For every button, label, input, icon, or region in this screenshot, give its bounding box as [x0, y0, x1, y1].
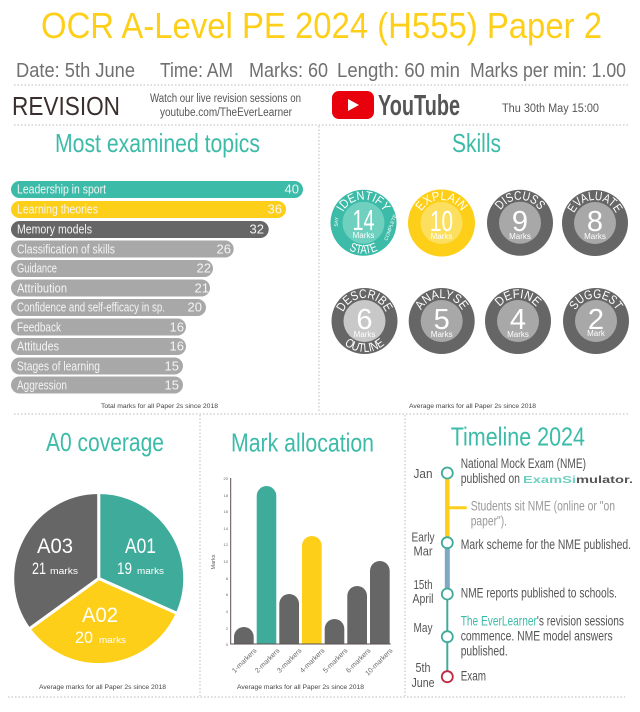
bar chart: topics: Confidence and self-efficacy in sp. — [17, 300, 165, 314]
caption: topics: Total marks for all Paper 2s since 2018 — [101, 404, 219, 410]
skill badge: identify 14 marks: STATE — [350, 242, 378, 254]
bar chart: mark allocation: 10 — [224, 559, 229, 564]
icon: youtube logo — [332, 90, 460, 122]
skill badge: explain 10 marks: EXPLAIN — [415, 191, 468, 211]
skill badge: explain 10 marks: Marks — [431, 232, 452, 241]
timeline events: ExamSi mulator. — [523, 475, 633, 486]
pie chart: AO coverage: 20 — [75, 628, 93, 647]
pie chart: AO coverage: 21 — [32, 559, 46, 578]
bar chart: mark allocation — [211, 476, 395, 677]
revision sessions text: Watch our live revision sessions on — [150, 93, 301, 105]
panel: timeline — [412, 422, 633, 690]
skill badge: explain 10 marks — [408, 190, 475, 256]
bar chart: topics: 22 — [197, 260, 211, 276]
timeline events: National Mock Exam (NME) — [461, 456, 586, 471]
heading: skills: Skills — [452, 128, 501, 158]
skill badge: define 4 marks: DEFINE — [494, 289, 542, 306]
skill badge: identify 14 marks — [330, 190, 399, 256]
bar chart: mark allocation: 3-markers — [276, 647, 304, 675]
bar chart: mark allocation: 1-markers — [231, 647, 259, 675]
revision sessions text: youtube.com/TheEverLearner — [160, 107, 292, 119]
skill badge: evaluate 8 marks: Marks — [584, 232, 606, 241]
pie chart: AO coverage: marks — [50, 566, 79, 576]
exam details row: Time: AM — [160, 60, 233, 82]
bar chart: mark allocation: 6 — [226, 592, 229, 597]
skill badge: identify 14 marks: SAY — [334, 216, 340, 227]
heading: timeline 2024: Timeline 2024 — [451, 422, 585, 452]
bar chart: topics: Memory models — [17, 222, 92, 236]
timeline dates: Mar — [414, 544, 433, 559]
bar chart: mark allocation: 18 — [224, 493, 229, 498]
bar chart: mark allocation: 0 — [226, 642, 229, 647]
exam details row: Marks: 60 — [249, 60, 328, 82]
bar chart: topics: 15 — [165, 378, 179, 392]
bar chart: mark allocation: Marks — [211, 554, 217, 569]
skill badge: suggest 2 mark — [563, 288, 629, 354]
exam details row — [16, 60, 626, 82]
skill badge: define 4 marks — [485, 288, 551, 354]
skill badge: define 4 marks: Marks — [507, 330, 529, 339]
bar chart: mark allocation: 8 — [226, 576, 229, 581]
skill badge: describe outline 6 marks: Marks — [354, 330, 375, 339]
timeline events: published. — [461, 644, 508, 659]
skill badge: identify 14 marks: Marks — [353, 231, 374, 240]
timeline dates — [412, 466, 435, 690]
bar chart: topics: 16 — [170, 338, 184, 354]
bar chart: topics: 36 — [268, 202, 282, 216]
bar chart: mark allocation: 2-markers — [254, 647, 282, 675]
skill badge: discuss 9 marks — [487, 190, 553, 256]
bar chart: topics: 40 — [285, 182, 299, 196]
skill badge: suggest 2 mark: SUGGEST — [570, 289, 624, 310]
timeline dates: April — [412, 591, 434, 606]
bar chart: topics: Learning theories — [17, 202, 98, 216]
exam details row: Date: 5th June — [16, 60, 135, 82]
caption: mark allocation: Average marks for all Paper 2s since 2018 — [237, 685, 365, 691]
panel: AO coverage — [13, 427, 185, 691]
skill badge: describe outline 6 marks: DESCRIBE — [336, 289, 393, 312]
skill badge: describe outline 6 marks — [332, 288, 398, 354]
timeline dates: Jan — [414, 466, 432, 481]
bar chart: mark allocation: 4 — [226, 609, 229, 614]
skill badge: discuss 9 marks: Marks — [509, 232, 531, 241]
session date: Thu 30th May 15:00 — [502, 103, 599, 115]
skill badge: evaluate 8 marks: 8 — [587, 206, 603, 238]
pie chart: AO coverage: A02 — [82, 604, 118, 627]
pie chart: AO coverage: marks — [137, 566, 165, 576]
heading: mark allocation: Mark allocation — [231, 428, 374, 458]
skill badge: identify 14 marks: IDENTIFY — [336, 190, 391, 212]
bar chart: mark allocation: 14 — [224, 526, 229, 531]
bar chart: topics: Attribution — [17, 280, 67, 296]
pie chart: AO coverage: A01 — [125, 535, 156, 558]
bar chart: topics: 20 — [188, 300, 202, 314]
bar chart: topics: 26 — [217, 242, 231, 256]
timeline events — [461, 456, 633, 684]
timeline dates: 15th — [414, 577, 432, 592]
revision banner — [12, 90, 599, 122]
heading: AO coverage: A0 coverage — [46, 427, 164, 457]
skill badge: identify 14 marks: COMPLETE — [384, 213, 399, 242]
timeline events: Exam — [461, 669, 486, 684]
timeline dates: June — [412, 675, 434, 690]
skill badge: evaluate 8 marks: EVALUATE — [567, 191, 623, 213]
skill badge: suggest 2 mark: 2 — [588, 304, 604, 336]
pie chart: AO coverage: marks — [99, 635, 127, 645]
skill badge: discuss 9 marks: 9 — [512, 206, 528, 238]
bar chart: mark allocation: 6-markers — [345, 647, 373, 675]
bar chart: topics: Feedback — [17, 320, 61, 334]
bar chart: topics: 15 — [165, 358, 179, 374]
panel: skills — [330, 128, 629, 410]
bar chart: topics: 32 — [250, 222, 264, 236]
skill badge: analyse 5 marks: ANALYSE — [416, 289, 469, 310]
bar chart: topics: Aggression — [17, 378, 67, 392]
skill badge: evaluate 8 marks — [562, 190, 628, 256]
skill badge: define 4 marks: 4 — [510, 304, 526, 336]
caption: AO coverage: Average marks for all Paper 2s since 2018 — [39, 685, 167, 691]
panel: most examined topics — [11, 128, 303, 410]
bar chart: mark allocation: 20 — [224, 476, 229, 481]
bar chart: mark allocation: 2 — [226, 626, 229, 631]
bar chart: topics: Leadership in sport — [17, 182, 106, 196]
title: OCR A-Level PE 2024 (H555) Paper 2 — [41, 5, 602, 46]
pie chart: AO coverage: A03 — [37, 535, 73, 558]
panel: mark allocation — [211, 428, 395, 691]
skill badge: analyse 5 marks: 5 — [434, 304, 450, 336]
timeline dates: Early — [412, 530, 435, 545]
timeline events: paper"). — [471, 514, 507, 529]
bar chart: topics: Attitudes — [17, 338, 59, 354]
bar chart: mark allocation: 4-markers — [299, 647, 327, 675]
skill badge: analyse 5 marks: Marks — [431, 330, 453, 339]
pie chart: AO coverage — [13, 492, 185, 665]
timeline dates: 5th — [416, 660, 430, 675]
skill badge: analyse 5 marks — [408, 288, 475, 354]
bar chart: mark allocation: 10-markers — [364, 647, 395, 677]
skill badge: identify 14 marks: 14 — [352, 205, 374, 237]
timeline dates: May — [414, 620, 433, 635]
bar chart: topics — [11, 181, 303, 394]
bar chart: mark allocation: 12 — [224, 542, 229, 547]
icon: youtube logo: YouTube — [378, 90, 460, 122]
timeline events: published on — [461, 471, 520, 486]
timeline track — [442, 468, 467, 682]
caption: skills: Average marks for all Paper 2s since 2018 — [409, 404, 537, 410]
bar chart: mark allocation: 16 — [224, 509, 229, 514]
bar chart: mark allocation: 5-markers — [322, 647, 350, 675]
skill badge: explain 10 marks: 10 — [430, 206, 453, 238]
revision heading: REVISION — [12, 91, 120, 121]
bar chart: topics: Classification of skills — [17, 242, 115, 256]
bar chart: topics: 21 — [195, 280, 209, 296]
skill badge: describe outline 6 marks: 6 — [356, 304, 373, 336]
skill badge: discuss 9 marks: DISCUSS — [494, 191, 545, 210]
heading: most examined topics: Most examined topics — [55, 128, 260, 158]
skill badge: describe outline 6 marks: OUTLINE — [346, 338, 384, 352]
revision sessions text — [150, 93, 301, 119]
exam details row: Length: 60 min — [337, 60, 460, 82]
bar chart: topics: Guidance — [17, 260, 57, 276]
bar chart: topics: Stages of learning — [17, 358, 100, 374]
pie chart: AO coverage: 19 — [117, 559, 132, 578]
skill badge: suggest 2 mark: Mark — [587, 329, 606, 338]
bar chart: topics: 16 — [170, 320, 184, 334]
